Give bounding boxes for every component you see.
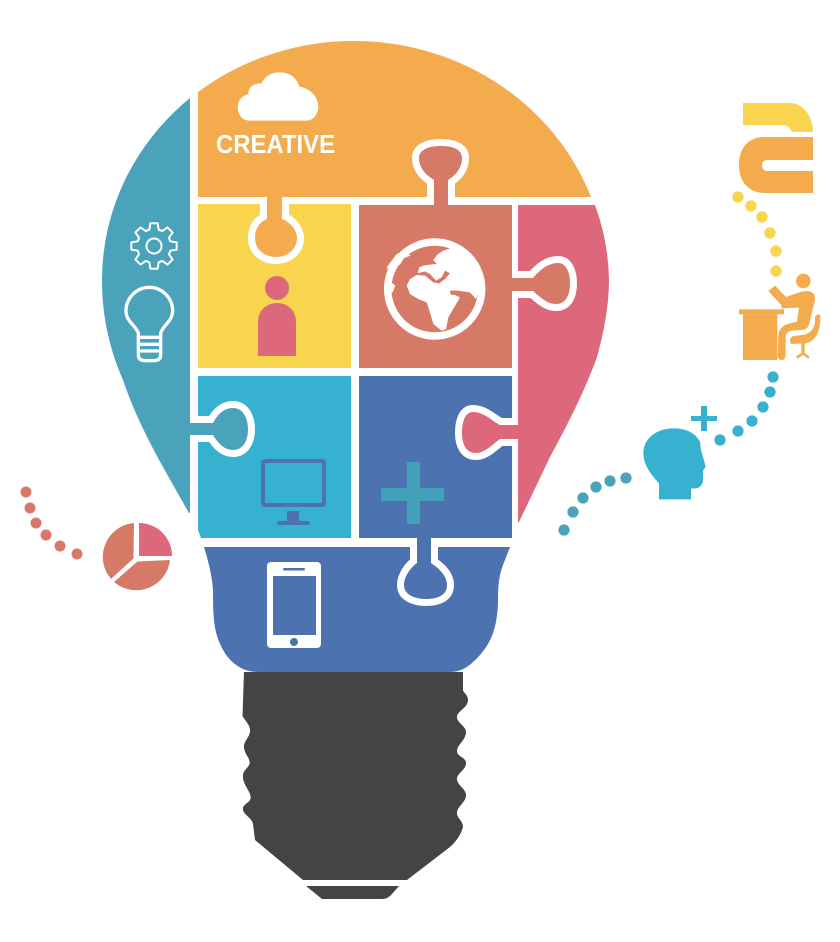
icon: cloud xyxy=(238,72,318,121)
panel: teal left bulb piece xyxy=(102,98,190,513)
panel: terracotta square piece xyxy=(359,205,512,368)
puzzle tab: terracotta into orange xyxy=(419,146,462,205)
icon: person reading at desk xyxy=(739,274,820,360)
yellow dotted path xyxy=(732,191,782,277)
panel: cyan square piece xyxy=(198,376,351,538)
puzzle tab: orange into yellow xyxy=(255,197,297,257)
terracotta dotted path xyxy=(20,486,82,560)
icon: gear xyxy=(131,223,177,269)
icon: light bulb outline xyxy=(126,287,173,361)
puzzle tab: blue into bottom piece xyxy=(404,538,447,599)
cyan dotted path xyxy=(714,371,779,446)
heading: CREATIVE: CREATIVE xyxy=(216,129,335,159)
icon: small cyan plus xyxy=(691,406,717,431)
panel: pink right bulb piece xyxy=(518,205,609,522)
icon: pie chart xyxy=(103,523,172,590)
icon: person xyxy=(258,276,296,356)
panel: yellow square piece xyxy=(198,204,351,368)
icon: head silhouette xyxy=(643,428,706,499)
puzzle tab: terracotta into pink xyxy=(512,263,570,304)
icon: yellow and orange arrow shapes xyxy=(739,103,813,193)
bulb screw base xyxy=(242,672,468,899)
puzzle tab: teal into cyan xyxy=(190,408,248,450)
icon: globe xyxy=(387,242,482,336)
icon: smartphone xyxy=(267,562,321,648)
icon: plus xyxy=(381,462,444,524)
puzzle tab: pink into blue xyxy=(462,412,518,453)
panel: blue bottom piece xyxy=(204,547,510,672)
panel: orange dome piece xyxy=(198,41,591,197)
panel: blue square piece xyxy=(359,376,512,538)
icon: monitor xyxy=(263,461,324,525)
teal dotted path xyxy=(558,472,632,536)
